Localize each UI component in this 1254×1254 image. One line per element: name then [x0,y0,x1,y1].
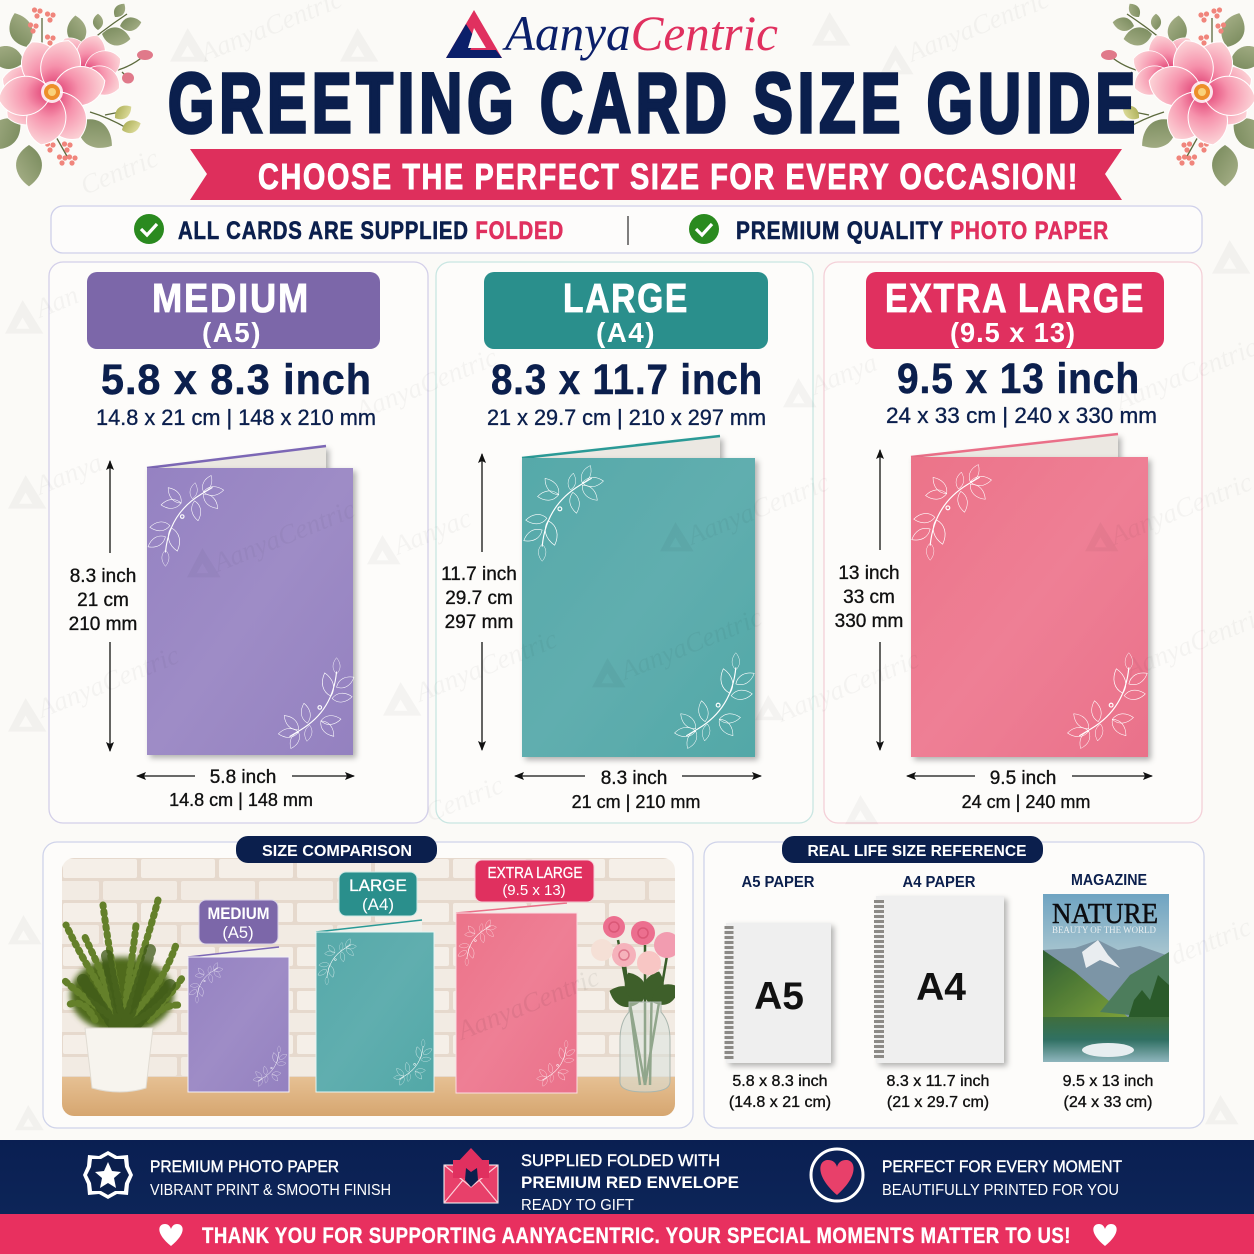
feature: photo paper: PREMIUM PHOTO PAPER [150,1158,339,1176]
inch size: 9.5 x 13 inch [897,355,1140,403]
feature: every moment: BEAUTIFULLY PRINTED FOR YOU [882,1182,1119,1199]
icon: heart right [1093,1224,1117,1246]
watermarks: Aanyac [387,502,475,561]
icon: heart left [159,1224,183,1246]
size badge large [484,272,768,349]
icon: heart [811,1149,863,1201]
label extra large [475,860,594,902]
height dimension: 29.7 cm [445,588,513,609]
logo wordmark: AanyaCentric [502,5,778,61]
bottom navy band [0,1140,1254,1214]
comparison scene [62,858,683,1116]
feature: red envelope [521,1152,739,1214]
watermarks: Centric [76,142,162,201]
flowers in vase [591,916,683,1092]
height dimension: 330 mm [835,611,903,632]
size badge large: LARGE [563,275,689,321]
feature: photo paper: VIBRANT PRINT & SMOOTH FINISH [150,1182,391,1199]
item: a5 paper: A5 PAPER [742,874,815,891]
metric size: 24 x 33 cm | 240 x 330 mm [886,403,1157,428]
size badge large: (A4) [596,317,656,348]
size badge medium: MEDIUM [152,275,310,321]
icon: envelope [444,1148,498,1203]
width dimension: 5.8 inch [210,767,276,788]
watermarks: AanyaCentric [207,494,359,578]
watermarks: AanyaCentric [614,602,766,686]
card medium comparison [188,947,289,1092]
item: magazine: MAGAZINE [1071,872,1147,889]
logo [446,5,778,61]
size badge medium [87,272,380,349]
potted plant [64,900,184,1092]
icon: check right [689,214,719,244]
watermarks: AanyaCentric [1104,467,1254,551]
watermarks: Centric [421,769,507,828]
item: a4 paper: A4 [916,966,966,1009]
note: folded: ALL CARDS ARE SUPPLIED FOLDED [178,217,564,245]
size badge medium: (A5) [202,317,262,348]
width dimension: 24 cm | 240 mm [962,792,1090,812]
height dimension: 13 inch [838,563,900,584]
label extra large: EXTRA LARGE [488,865,582,882]
watermarks: Aanya [804,347,881,401]
feature: every moment: PERFECT FOR EVERY MOMENT [882,1158,1122,1176]
width dimension [137,767,354,810]
pill: real life: REAL LIFE SIZE REFERENCE [808,843,1027,860]
watermarks: AanyaCentric [409,624,561,708]
item: a4 paper: (21 x 29.7 cm) [887,1094,989,1111]
thank you message: THANK YOU FOR SUPPORTING AANYACENTRIC. YOUR SPECIAL MOMENTS MATTER TO US! [202,1223,1071,1248]
item: a4 paper: A4 PAPER [902,874,976,891]
size badge extra large: EXTRA LARGE [885,275,1145,321]
item: a5 paper: A5 [754,975,804,1018]
label medium: MEDIUM [208,905,270,923]
width dimension: 14.8 cm | 148 mm [169,790,313,810]
pill: size comparison [236,836,437,863]
width dimension [907,768,1152,812]
item: a4 paper [876,874,1004,1111]
card extra large comparison [456,903,577,1093]
height dimension: 11.7 inch [441,564,517,585]
ribbon subtitle [190,149,1122,200]
watermarks: AanyaCentric [771,644,923,728]
item: a4 paper: 8.3 x 11.7 inch [887,1073,989,1090]
panel: size comparison [43,836,693,1128]
item: magazine: BEAUTY OF THE WORLD [1052,926,1156,936]
feature: red envelope: PREMIUM RED ENVELOPE [521,1174,739,1192]
watermarks: Aan [29,279,83,324]
label extra large: (9.5 x 13) [502,882,566,899]
watermarks: Aanya [29,447,106,501]
item: magazine: NATURE [1052,899,1158,930]
height dimension: 33 cm [843,587,895,608]
card large [521,436,757,757]
inch size: 5.8 x 8.3 inch [101,356,372,404]
watermarks: AanyaCentric [681,467,833,551]
height dimension: 297 mm [445,612,513,633]
item: magazine: 9.5 x 13 inch [1063,1073,1153,1090]
feature: every moment [882,1158,1122,1199]
label medium [199,900,278,944]
feature: photo paper [150,1158,391,1199]
label medium: (A5) [222,924,254,942]
watermarks: denttric [1166,911,1254,971]
watermarks: AanyaCentric [349,342,501,426]
metric size: 21 x 29.7 cm | 210 x 297 mm [487,405,766,430]
corner flower right [1101,1,1254,186]
item: a5 paper: (14.8 x 21 cm) [729,1094,831,1111]
width dimension: 8.3 inch [601,768,667,789]
corner flower left [0,1,153,186]
panel: large [436,262,813,823]
item: magazine [1043,872,1169,1111]
icon: check left [134,214,164,244]
item: a5 paper [726,874,831,1111]
card medium [146,446,356,755]
card extra large [909,434,1150,757]
inch size: 8.3 x 11.7 inch [491,356,763,404]
size badge extra large: (9.5 x 13) [950,317,1076,348]
feature: red envelope: READY TO GIFT [521,1197,635,1214]
label large [339,872,417,916]
height dimension [69,461,137,751]
height dimension: 210 mm [69,614,137,635]
watermarks: AanyaCentric [31,640,183,724]
width dimension [515,768,761,812]
height dimension: 21 cm [77,590,129,611]
label large: LARGE [349,876,407,895]
panel: extra large [824,262,1202,823]
icon: star badge [83,1151,133,1199]
info bar [51,206,1202,253]
watermarks: AanyaCentric [451,962,603,1046]
width dimension: 21 cm | 210 mm [572,792,700,812]
item: a5 paper: 5.8 x 8.3 inch [732,1073,828,1090]
height dimension: 8.3 inch [70,566,136,587]
height dimension [835,450,903,750]
pill: real life [782,836,1043,863]
ribbon subtitle: CHOOSE THE PERFECT SIZE FOR EVERY OCCASION! [258,156,1079,197]
card large comparison [316,920,434,1092]
size badge extra large [866,272,1164,349]
panel: real life size reference [704,836,1204,1128]
panel: medium [49,262,428,823]
width dimension: 9.5 inch [990,768,1056,789]
metric size: 14.8 x 21 cm | 148 x 210 mm [96,405,376,430]
label large: (A4) [362,895,394,914]
height dimension [441,454,517,750]
item: magazine: (24 x 33 cm) [1064,1094,1152,1111]
footer banner [0,1214,1254,1254]
feature: red envelope: SUPPLIED FOLDED WITH [521,1152,720,1170]
pill: size comparison: SIZE COMPARISON [262,843,412,860]
note: photo paper: PREMIUM QUALITY PHOTO PAPER [736,217,1109,245]
logo triangle [446,10,502,58]
